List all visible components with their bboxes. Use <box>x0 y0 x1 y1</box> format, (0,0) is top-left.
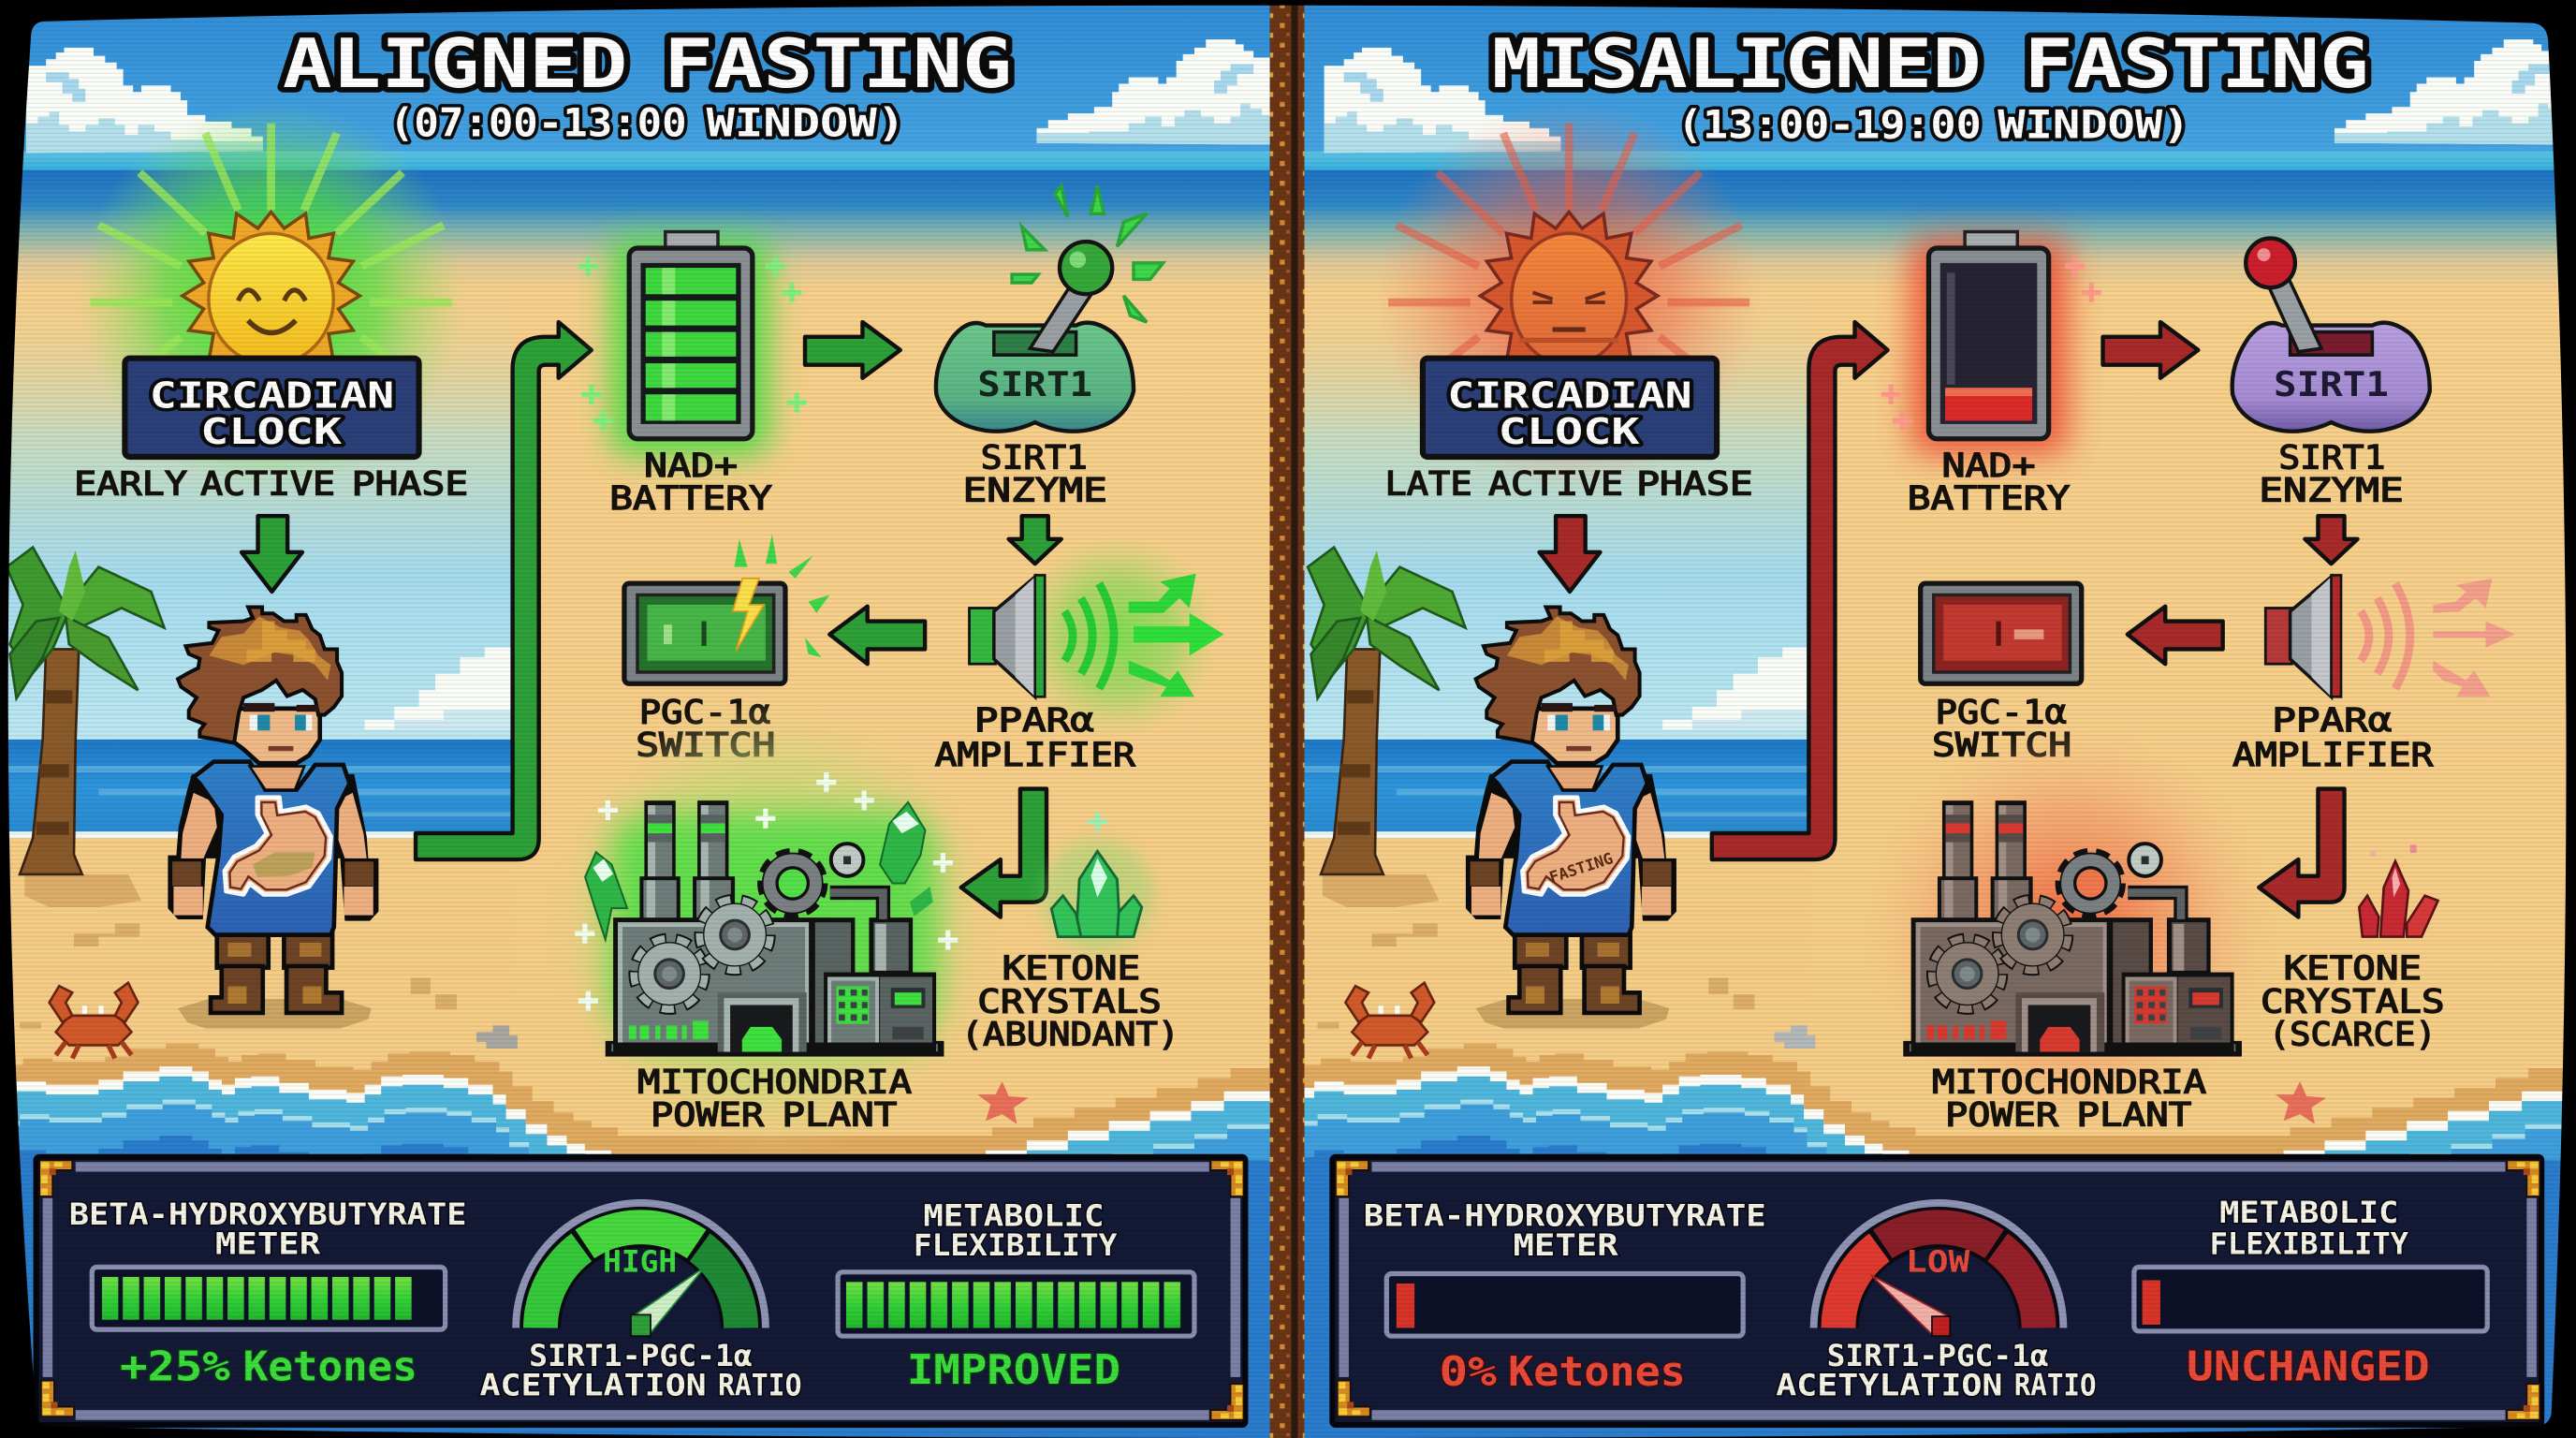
icon: mitochondria power plant dim <box>1865 723 2276 1134</box>
title: aligned fasting: FASTING <box>664 24 1012 103</box>
circadian clock sign <box>1423 359 1717 457</box>
bar: ketone meter empty <box>1386 1273 1743 1336</box>
icon: NAD+ battery low <box>1881 232 2101 455</box>
icon: SIRT1 joystick active <box>936 185 1164 432</box>
icon: PGC-1a switch off <box>1921 583 2082 683</box>
label: early active phase: EARLY <box>74 464 187 503</box>
label: ketone crystals abundant: KETONE <box>1003 949 1140 988</box>
arrow: clock to character <box>1540 516 1600 592</box>
icon: happy sun <box>183 212 359 365</box>
panel: aligned fasting <box>0 0 1305 1438</box>
label: late active phase: ACTIVE <box>1488 464 1623 503</box>
arrow: PPARa to PGC-1a <box>829 607 925 664</box>
label: SIRT1 enzyme <box>962 438 1107 509</box>
circadian clock sign: CIRCADIAN <box>150 374 394 417</box>
value: +25% ketones: Ketones <box>243 1343 417 1391</box>
label: beta-hydroxybutyrate meter <box>1364 1200 1766 1263</box>
label: SIRT1 enzyme: ENZYME <box>962 471 1107 509</box>
label: mitochondria power plant: PLANT <box>2076 1095 2191 1134</box>
label: ketone crystals scarce: (SCARCE) <box>2269 1015 2437 1053</box>
circadian clock sign: CLOCK <box>1499 411 1641 453</box>
label: SIRT1 enzyme: ENZYME <box>2259 471 2404 509</box>
label: ketone crystals scarce <box>2261 949 2445 1053</box>
label: PPARa amplifier: AMPLIFIER <box>2232 736 2434 774</box>
icon: mitochondria power plant glowing <box>542 698 1003 1159</box>
label: mitochondria power plant: POWER <box>1945 1095 2059 1134</box>
bar: ketone meter high <box>92 1267 446 1329</box>
label: PGC-1a switch: PGC-1α <box>1936 693 2067 731</box>
background: sky, sea and beach <box>1305 6 2567 1438</box>
arrow: SIRT1 to PPARa <box>2305 516 2358 564</box>
label: metabolic flexibility <box>2210 1196 2408 1261</box>
label: mitochondria power plant: MITOCHONDRIA <box>1932 1063 2206 1101</box>
label: SIRT1-PGC-1a acetylation ratio <box>479 1340 801 1402</box>
icon: crab <box>50 983 138 1058</box>
label: NAD+ battery: NAD+ <box>1942 447 2036 485</box>
arrow: plant to ketones hook <box>961 789 1046 917</box>
title: misaligned fasting: WINDOW) <box>1998 101 2190 147</box>
label: ketone crystals abundant <box>961 949 1179 1053</box>
background: sky, sea and beach <box>7 6 1270 1438</box>
panel: misaligned results dashboard <box>1332 1157 2541 1425</box>
label: NAD+ battery: BATTERY <box>609 479 772 518</box>
label: SIRT1-PGC-1a acetylation ratio: ACETYLATION <box>479 1369 707 1402</box>
icon: ketone crystals abundant <box>1042 812 1153 951</box>
bar: metabolic flexibility empty <box>2134 1267 2487 1331</box>
label: mitochondria power plant <box>1932 1063 2206 1134</box>
label: metabolic flexibility: METABOLIC <box>923 1200 1104 1234</box>
label: mitochondria power plant: POWER <box>651 1095 765 1134</box>
label: SIRT1 enzyme: SIRT1 <box>2278 438 2385 477</box>
label: early active phase <box>74 464 468 503</box>
label: PGC-1a switch <box>636 693 775 764</box>
label: SIRT1-PGC-1a acetylation ratio <box>1776 1340 2097 1402</box>
arrow: plant to ketones hook <box>2259 789 2345 917</box>
label: PPARa amplifier <box>2232 701 2434 774</box>
title: misaligned fasting: (13:00-19:00 <box>1677 101 1982 147</box>
gauge: high acetylation ratio <box>516 1203 766 1336</box>
label: beta-hydroxybutyrate meter: METER <box>1513 1229 1619 1263</box>
title: aligned fasting: WINDOW) <box>707 100 905 146</box>
panel: misaligned fasting <box>1298 0 2576 1438</box>
label: NAD+ battery: NAD+ <box>644 447 738 485</box>
value: 0% ketones: Ketones <box>1508 1348 1686 1396</box>
arrow: battery to SIRT1 <box>805 322 900 378</box>
arrow: battery to SIRT1 <box>2103 322 2198 378</box>
value: +25% ketones: +25% <box>120 1343 230 1391</box>
icon: SIRT1 joystick inactive <box>2232 239 2430 432</box>
label: SIRT1-PGC-1a acetylation ratio: RATIO <box>718 1369 801 1402</box>
label: beta-hydroxybutyrate meter: BETA-HYDROXYBUTYRATE <box>1364 1200 1766 1234</box>
icon: PPARa amplifier speaker active <box>970 535 1224 738</box>
icon: PPARa amplifier speaker faded <box>2265 575 2515 697</box>
center wood divider <box>1270 0 1305 1438</box>
title: aligned fasting: (07:00-13:00 <box>389 100 687 146</box>
label: PPARa amplifier <box>935 701 1136 774</box>
character with stomach <box>168 608 378 1029</box>
label: NAD+ battery <box>1908 447 2070 518</box>
icon: NAD+ battery full <box>578 232 807 455</box>
title: misaligned fasting: MISALIGNED <box>1492 24 1982 103</box>
icon: starfish <box>2276 1081 2326 1124</box>
label: mitochondria power plant: PLANT <box>782 1095 897 1134</box>
label: beta-hydroxybutyrate meter: METER <box>215 1227 321 1261</box>
label: PGC-1a switch: PGC-1α <box>639 693 770 731</box>
icon: SIRT1 joystick active: SIRT1 <box>977 364 1092 404</box>
arrow: character to NAD+ battery <box>416 322 592 859</box>
label: SIRT1-PGC-1a acetylation ratio: ACETYLATION <box>1776 1369 2002 1402</box>
title: aligned fasting: ALIGNED <box>283 24 627 103</box>
icon: sun glow and rays <box>1375 102 1763 490</box>
circadian clock sign: CIRCADIAN <box>1447 374 1692 417</box>
label: ketone crystals scarce: CRYSTALS <box>2261 982 2445 1020</box>
label: NAD+ battery: BATTERY <box>1908 479 2070 518</box>
label: metabolic flexibility: FLEXIBILITY <box>914 1229 1117 1263</box>
arrow: PPARa to PGC-1a <box>2128 607 2223 664</box>
character with fasting stomach: FASTING <box>1547 849 1616 887</box>
icon: palm tree <box>7 548 165 874</box>
label: metabolic flexibility: FLEXIBILITY <box>2210 1227 2408 1261</box>
label: metabolic flexibility: METABOLIC <box>2219 1196 2398 1230</box>
icon: rock <box>1775 1025 1815 1049</box>
label: ketone crystals scarce: KETONE <box>2284 949 2422 988</box>
label: PGC-1a switch: SWITCH <box>636 726 775 764</box>
value: unchanged: UNCHANGED <box>2187 1343 2430 1391</box>
label: SIRT1 enzyme <box>2259 438 2404 509</box>
icon: sun glow and rays <box>77 102 465 490</box>
title: misaligned fasting <box>1492 24 2369 147</box>
title: misaligned fasting: FASTING <box>2024 24 2369 103</box>
icon: palm tree <box>1308 548 1466 874</box>
label: SIRT1-PGC-1a acetylation ratio: SIRT1-PGC-1α <box>1827 1340 2049 1373</box>
panel: aligned results dashboard <box>37 1157 1245 1425</box>
label: SIRT1 enzyme: SIRT1 <box>981 438 1088 477</box>
arrow: character to NAD+ battery <box>1712 322 1888 859</box>
arrow: SIRT1 to PPARa <box>1009 516 1061 564</box>
bar: metabolic flexibility high <box>838 1272 1194 1336</box>
gauge: low acetylation ratio: LOW <box>1906 1246 1971 1280</box>
label: metabolic flexibility <box>914 1200 1117 1263</box>
label: beta-hydroxybutyrate meter <box>69 1198 466 1261</box>
icon: tired sun <box>1480 212 1658 365</box>
arrow: clock to character <box>242 516 302 592</box>
icon: rock <box>476 1025 518 1049</box>
label: SIRT1-PGC-1a acetylation ratio: RATIO <box>2014 1369 2097 1402</box>
label: mitochondria power plant: MITOCHONDRIA <box>637 1063 912 1101</box>
label: PGC-1a switch: SWITCH <box>1932 726 2071 764</box>
label: late active phase: PHASE <box>1636 464 1753 503</box>
label: PPARa amplifier: AMPLIFIER <box>935 736 1136 774</box>
value: +25% ketones <box>120 1343 417 1391</box>
icon: ketone crystals scarce <box>2359 844 2438 937</box>
value: improved: IMPROVED <box>907 1346 1120 1394</box>
icon: PGC-1a switch on <box>624 535 829 683</box>
label: SIRT1-PGC-1a acetylation ratio: SIRT1-PGC-1α <box>529 1340 753 1373</box>
circadian clock sign <box>124 359 419 457</box>
label: PPARa amplifier: PPARα <box>2272 701 2392 740</box>
value: 0% ketones: 0% <box>1439 1348 1498 1396</box>
icon: crab <box>1345 983 1434 1058</box>
gauge: high acetylation ratio: HIGH <box>603 1246 677 1280</box>
label: early active phase: PHASE <box>352 464 468 503</box>
icon: starfish <box>977 1081 1029 1124</box>
gauge: low acetylation ratio <box>1814 1203 2063 1336</box>
title: aligned fasting <box>283 24 1012 146</box>
circadian clock sign: CLOCK <box>200 411 343 453</box>
label: PGC-1a switch <box>1932 693 2071 764</box>
label: late active phase <box>1385 464 1753 503</box>
character with fasting stomach <box>1466 608 1676 1029</box>
label: ketone crystals abundant: CRYSTALS <box>977 982 1162 1020</box>
label: NAD+ battery <box>609 447 772 518</box>
icon: SIRT1 joystick inactive: SIRT1 <box>2274 364 2389 404</box>
label: beta-hydroxybutyrate meter: BETA-HYDROXYBUTYRATE <box>69 1198 466 1232</box>
label: early active phase: ACTIVE <box>200 464 335 503</box>
label: PPARa amplifier: PPARα <box>974 701 1094 740</box>
label: mitochondria power plant <box>637 1063 912 1134</box>
label: ketone crystals abundant: (ABUNDANT) <box>961 1015 1179 1053</box>
label: late active phase: LATE <box>1385 464 1472 503</box>
